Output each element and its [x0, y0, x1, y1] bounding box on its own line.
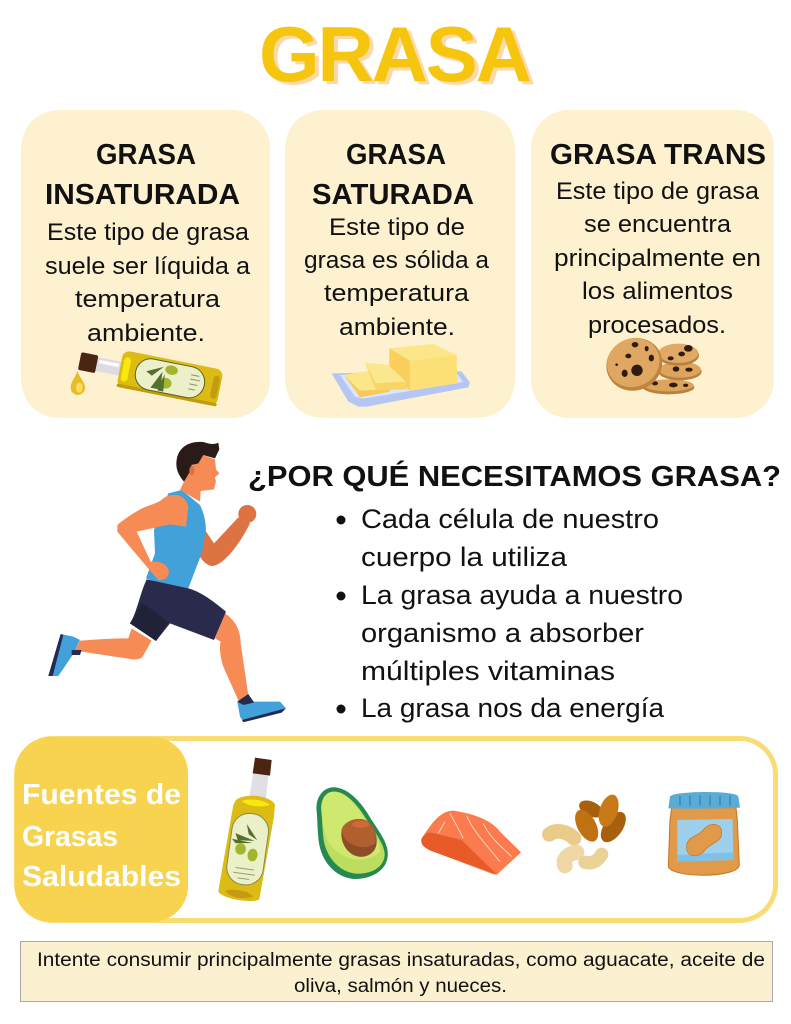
icon: olive oil bottle pouring — [71, 342, 224, 407]
icon: salmon — [421, 811, 521, 875]
panel: fuentes de grasas saludables — [15, 737, 776, 922]
heading: grasa insaturada — [45, 139, 240, 211]
text: descripción insaturada — [45, 219, 250, 347]
heading: por qué necesitamos grasa: ¿POR QUÉ NECESITAMOS GRASA? — [248, 459, 781, 493]
text: descripción saturada — [304, 214, 489, 341]
heading: grasa insaturada: INSATURADA — [45, 179, 240, 211]
text: descripción trans: los alimentos — [582, 278, 733, 305]
list: beneficios de la grasa: La grasa ayuda a nuestro — [361, 580, 683, 610]
icon: peanut butter jar — [668, 792, 740, 875]
icon: runner — [48, 442, 286, 722]
text: descripción saturada: ambiente. — [339, 314, 455, 341]
label: fuentes de grasas saludables: Grasas — [22, 821, 118, 853]
text: descripción insaturada: temperatura — [75, 286, 220, 313]
text: descripción saturada: temperatura — [324, 280, 469, 307]
text: descripción trans: Este tipo de grasa — [556, 178, 759, 205]
text: descripción insaturada: suele ser líquida a — [45, 253, 250, 280]
callout: recomendación: Intente consumir principalmente grasas insaturadas, como aguacate, aceite de — [37, 950, 765, 971]
list: beneficios de la grasa: organismo a absorber — [361, 618, 644, 648]
list: beneficios de la grasa: múltiples vitaminas — [361, 656, 615, 686]
callout: recomendación: oliva, salmón y nueces. — [294, 976, 507, 997]
text: descripción trans: principalmente en — [554, 245, 761, 272]
icon: avocado — [316, 787, 388, 879]
icon: butter on dish — [332, 344, 470, 407]
title: GRASA — [259, 10, 532, 98]
heading: grasa saturada — [312, 139, 474, 211]
icon: cookies — [598, 329, 702, 400]
list: beneficios de la grasa: cuerpo la utiliza — [361, 542, 568, 572]
label: fuentes de grasas saludables — [15, 737, 188, 922]
text: descripción insaturada: ambiente. — [87, 320, 205, 347]
callout: recomendación — [20, 942, 772, 1002]
text: descripción saturada: Este tipo de — [329, 214, 465, 241]
heading: grasa trans: GRASA TRANS — [550, 139, 766, 171]
list: beneficios de la grasa: La grasa nos da energía — [361, 693, 665, 723]
text: descripción insaturada: Este tipo de grasa — [47, 219, 249, 246]
text: descripción trans: procesados. — [588, 312, 726, 339]
panel: grasa trans — [531, 110, 774, 418]
text: descripción trans: se encuentra — [584, 211, 731, 238]
icon: almonds and cashews — [549, 792, 631, 866]
text: descripción saturada: grasa es sólida a — [304, 247, 489, 274]
list: beneficios de la grasa: Cada célula de nuestro — [361, 504, 659, 534]
panel: grasa saturada — [285, 110, 515, 418]
heading: grasa saturada: GRASA — [346, 139, 446, 171]
heading: grasa saturada: SATURADA — [312, 179, 474, 211]
text: descripción trans — [554, 178, 761, 339]
label: fuentes de grasas saludables: Saludables — [22, 861, 181, 893]
heading: grasa insaturada: GRASA — [96, 139, 196, 171]
label: fuentes de grasas saludables: Fuentes de — [22, 779, 181, 811]
panel: grasa insaturada — [21, 110, 270, 418]
list: beneficios de la grasa — [336, 504, 683, 723]
icon: olive oil bottle — [218, 758, 275, 901]
